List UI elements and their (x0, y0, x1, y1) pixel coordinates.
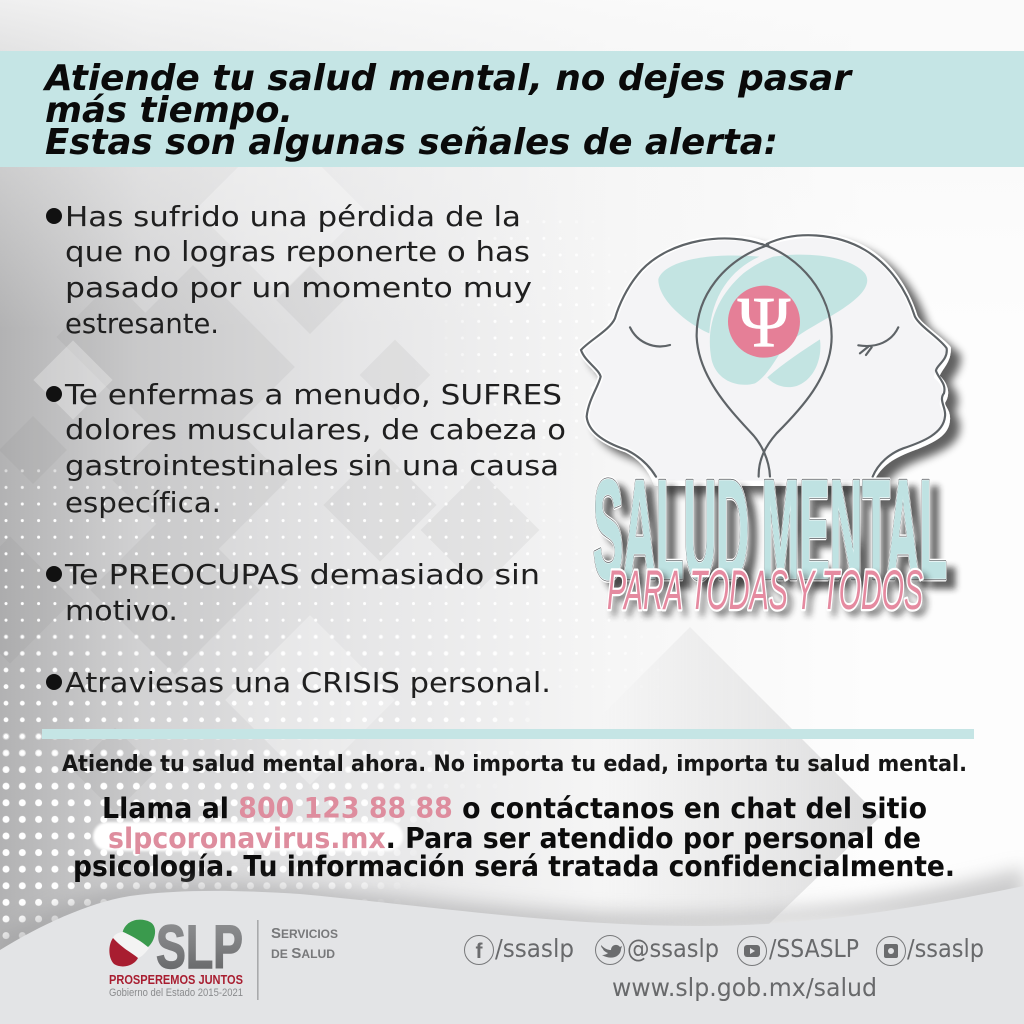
sign 1: estresante. (65, 308, 219, 340)
youtube (738, 934, 859, 966)
sign 2: Te enfermas a menudo, SUFRES (64, 379, 562, 411)
warning signs list (46, 201, 566, 699)
sign 4: Atraviesas una CRISIS personal. (65, 667, 551, 699)
government line: Gobierno del Estado 2015-2021 (109, 987, 243, 999)
slogan: PROSPEREMOS JUNTOS (109, 972, 243, 987)
contact paragraph: Llama al 800 123 88 88 o contáctanos en chat del sitio (102, 792, 927, 825)
heading text: Atiende tu salud mental, no dejes pasar (42, 58, 853, 99)
health services label: SERVICIOS (271, 925, 338, 942)
divider bar (42, 729, 974, 739)
health services label: DE SALUD (271, 945, 335, 962)
heading text: más tiempo. (45, 90, 293, 131)
heading text: Estas son algunas señales de alerta: (45, 122, 778, 163)
sign 1: que no logras reponerte o has (65, 236, 530, 268)
sign 3: motivo. (65, 595, 178, 627)
sign 2 (46, 379, 566, 519)
psi badge: Ψ (738, 284, 791, 363)
facebook: f (476, 940, 484, 963)
contact paragraph: slpcoronavirus.mx. Para ser atendido por personal de (108, 822, 921, 855)
health services label (271, 925, 338, 962)
twitter (596, 934, 719, 964)
sign 2: específica. (65, 487, 221, 519)
brain shapes (658, 255, 867, 387)
logo letters: SLP (156, 913, 243, 981)
sign 3 (46, 559, 540, 627)
icon: green and red swirl (109, 920, 155, 966)
contact paragraph: psicología. Tu información será tratada confidencialmente. (73, 850, 955, 883)
heading banner (0, 51, 1024, 167)
facebook (464, 934, 574, 964)
twitter: @ssaslp (627, 934, 719, 963)
subheading: Atiende tu salud mental ahora. No importa tu edad, importa tu salud mental. (62, 751, 967, 777)
pill highlight behind website (93, 822, 403, 851)
logo separator (257, 920, 259, 1000)
sign 1 (46, 201, 532, 340)
head outlines (581, 235, 947, 477)
heading text (42, 58, 853, 163)
website: www.slp.gob.mx/salud (612, 973, 877, 1002)
sign 2: gastrointestinales sin una causa (65, 450, 559, 482)
sign 1: pasado por un momento muy (65, 272, 532, 304)
contact paragraph (73, 792, 955, 883)
call to action text (62, 751, 967, 883)
social links (464, 934, 984, 1002)
instagram: /ssaslp (907, 934, 984, 963)
sign 1: Has sufrido una pérdida de la (65, 201, 521, 233)
sign 2: dolores musculares, de cabeza o (65, 414, 566, 446)
sign 3: Te PREOCUPAS demasiado sin (64, 559, 540, 591)
youtube: /SSASLP (769, 934, 859, 963)
logo: SLP government (109, 913, 338, 1000)
facebook: /ssaslp (495, 934, 574, 963)
instagram (876, 934, 984, 966)
illustration: two faces with psi symbol (581, 235, 948, 483)
footer panel (0, 868, 1024, 1024)
faces silhouette (581, 235, 948, 483)
